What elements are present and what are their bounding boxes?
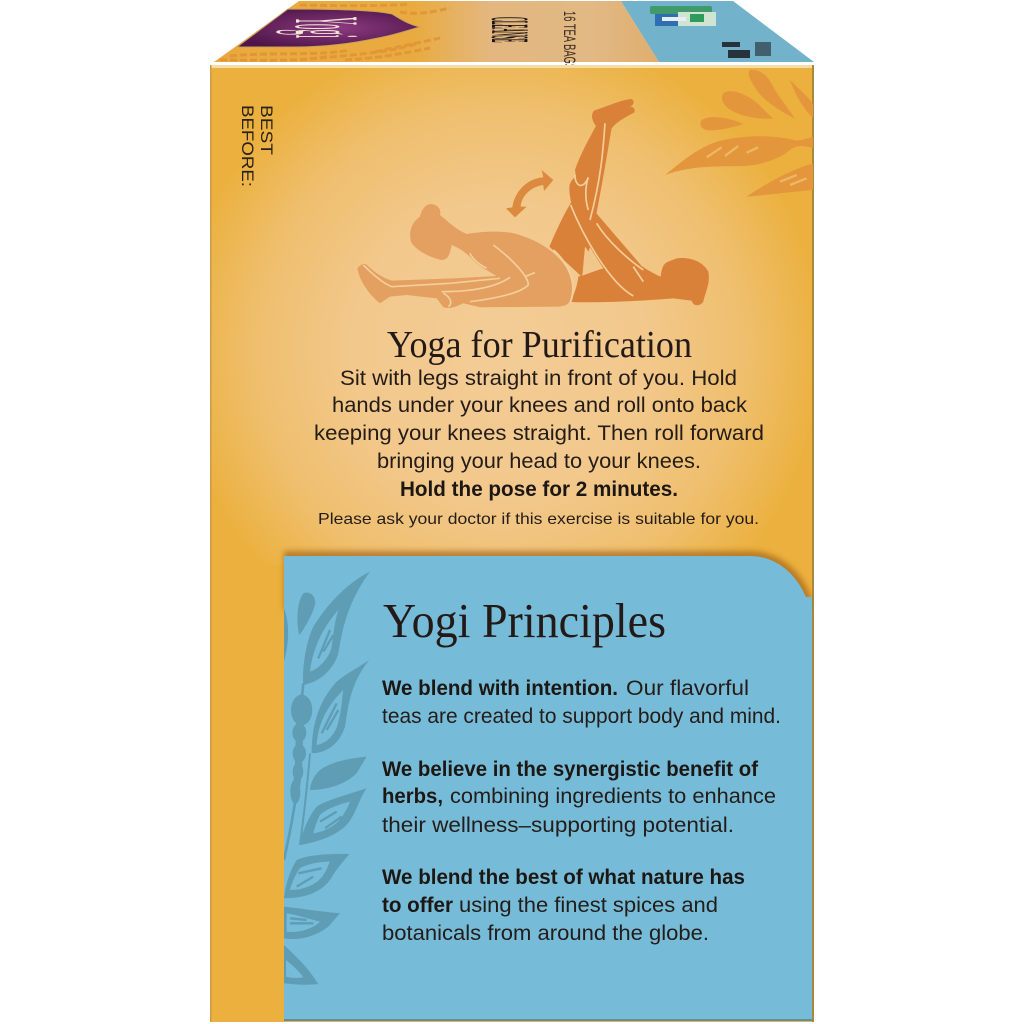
seated figure bbox=[357, 204, 573, 308]
text block: principle two: We believe in the synergistic benefit of bbox=[382, 758, 759, 781]
logo text: Yogi bbox=[275, 17, 376, 38]
box top panel bbox=[214, 1, 814, 70]
text block: principle two bbox=[382, 758, 776, 837]
certification seals bbox=[650, 6, 716, 26]
text block: principle one: teas are created to support body and mind. bbox=[382, 705, 781, 728]
illustration: yoga poses bbox=[357, 99, 709, 308]
heading: Yoga for Purification: Yoga for Purification bbox=[387, 324, 692, 366]
text block: principle three: botanicals from around the globe. bbox=[382, 922, 709, 945]
icon: top right leaf decoration bbox=[665, 70, 813, 197]
text block: principle one: Our flavorful bbox=[626, 677, 749, 700]
best before label: BEFORE: bbox=[238, 105, 256, 187]
tea bag count: 16 TEA BAGS bbox=[560, 11, 579, 70]
text block: yoga instructions bbox=[314, 367, 764, 528]
text block: principle two: their wellness–supporting potential. bbox=[382, 814, 734, 837]
purple logo banner bbox=[237, 9, 420, 47]
text block: yoga instructions: keeping your knees straight. Then roll forward bbox=[314, 422, 764, 445]
panel: Yogi Principles bbox=[284, 556, 813, 1021]
text block: principle two: herbs, bbox=[382, 785, 443, 808]
text block: principle three: using the finest spices and bbox=[459, 894, 718, 917]
text block: yoga instructions: Sit with legs straight in front of you. Hold bbox=[340, 367, 737, 390]
best before label: BEST bbox=[257, 105, 275, 155]
seated figure highlights bbox=[363, 245, 573, 307]
text block: principle three bbox=[382, 866, 745, 945]
text block: principle two: combining ingredients to enhance bbox=[450, 785, 776, 808]
heading: Yogi Principles: Yogi Principles bbox=[383, 593, 666, 648]
panel shadow bbox=[284, 551, 813, 610]
front panel background bbox=[210, 65, 814, 1022]
product name: CLEANSE bbox=[479, 17, 538, 42]
text block: yoga instructions: Please ask your doctor if this exercise is suitable for you. bbox=[318, 511, 759, 528]
top ornament bbox=[220, 4, 450, 60]
text block: principle three: We blend the best of what nature has bbox=[382, 866, 745, 889]
text block: principle one bbox=[382, 677, 781, 728]
side text marks bbox=[722, 42, 771, 58]
text block: yoga instructions: Hold the pose for 2 minutes. bbox=[400, 478, 678, 501]
text block: principle three: to offer bbox=[382, 894, 453, 917]
text block: principle one: We blend with intention. bbox=[382, 677, 618, 700]
text block: yoga instructions: bringing your head to your knees. bbox=[377, 450, 701, 473]
best before label bbox=[238, 105, 275, 187]
icon: blue leaf branch bbox=[284, 572, 370, 985]
triangular gap between legs and arm bbox=[583, 247, 601, 273]
reclining figure highlights bbox=[571, 123, 643, 296]
reclining figure bbox=[549, 99, 709, 305]
arrow: curved motion arrow bbox=[506, 170, 553, 217]
text block: yoga instructions: hands under your knees and roll onto back bbox=[332, 394, 748, 417]
